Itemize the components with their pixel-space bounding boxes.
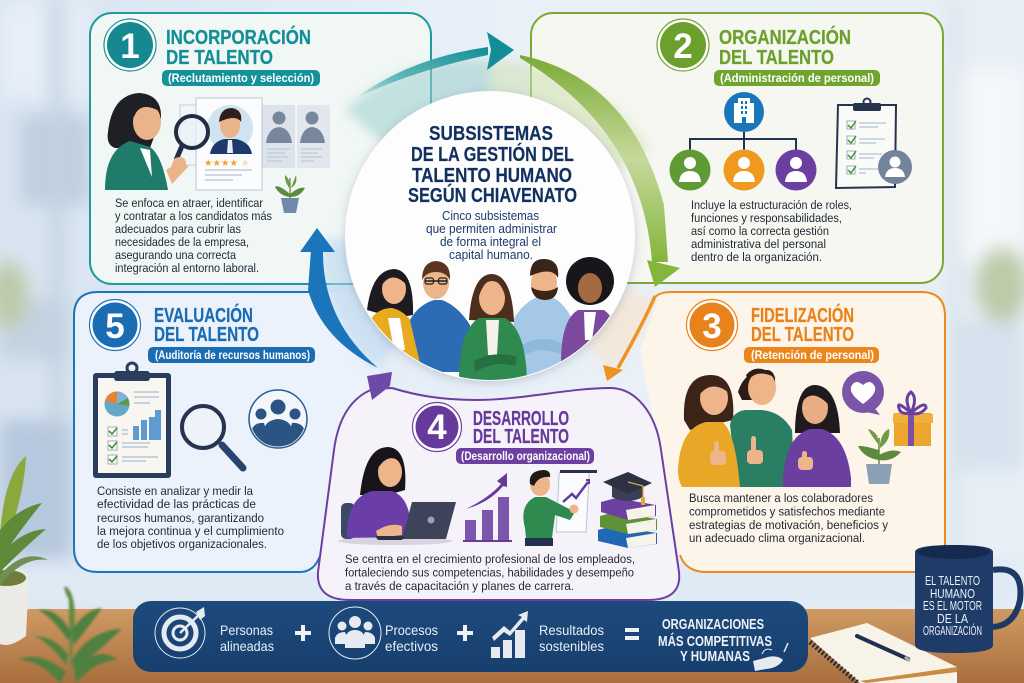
icon: company building [724,92,764,132]
badge 2: 2 [673,27,693,66]
plus sign [295,625,311,641]
mug text: EL TALENTO [925,573,980,588]
badge 5: 5 [105,307,125,346]
body text 3 [689,491,889,545]
notebook and pen [810,623,957,683]
body text 1: adecuados para cubrir las [115,222,241,236]
subtitle pill 4: (Desarrollo organizacional) [461,449,590,463]
body text 2: así como la correcta gestión [691,224,829,238]
body text 5: Consiste en analizar y medir la [97,484,253,498]
heading 1 [166,25,311,69]
icon: group of people [329,607,381,659]
icon: green employee [670,150,710,190]
icon: orange employee [724,150,764,190]
main title: DE LA GESTIÓN DEL [411,142,574,166]
heading 3: DEL TALENTO [751,324,854,346]
result text: ORGANIZACIONES [662,616,764,633]
plant: potted plant left [0,456,48,645]
body text 4: Se centra en el crecimiento profesional de los empleados, [345,552,635,566]
panel 2: organización del talento [531,13,943,283]
org chart [670,92,816,190]
result text [658,616,772,665]
body text 5: la mejora continua y el cumplimiento [97,524,284,538]
central subtitle: que permiten administrar [426,222,557,236]
body text 2 [691,198,852,264]
label: personas alineadas [220,622,274,654]
body text 1: asegurando una correcta [115,248,236,262]
badge 1 [104,19,156,71]
subtitle pill 2: (Administración de personal) [720,71,874,85]
illustration: woman at laptop [338,447,456,545]
person: woman in yellow blazer [367,269,427,367]
icon: plant pot [858,429,901,484]
heading 5: EVALUACIÓN [154,303,253,327]
central subtitle: de forma integral el [440,235,541,249]
body text 1: Se enfoca en atraer, identificar [115,196,263,210]
label: personas alineadas: Personas [220,622,273,638]
badge 4: 4 [427,408,447,447]
badge 5 [90,300,140,350]
heading 4 [473,408,569,448]
body text 1: y contratar a los candidatos más [115,209,272,223]
illustration: trainer with flip chart [523,470,597,546]
heading 3: FIDELIZACIÓN [751,303,854,327]
icon: clipboard with charts [93,363,171,478]
arrow: green 2 to 3 [520,55,680,287]
label: personas alineadas: alineadas [220,638,274,654]
icon: heart speech bubble [842,371,884,415]
subtitle pill 3: (Retención de personal) [751,348,874,362]
badge 3 [686,300,738,350]
panel 1: incorporación de talento [90,13,431,284]
heading 1: DE TALENTO [166,47,273,69]
heading 4: DESARROLLO [473,408,569,430]
main title: TALENTO HUMANO [412,165,572,187]
person: man in blue shirt [410,261,470,372]
illustration: three colleagues [678,369,851,487]
heading 3 [751,303,854,346]
heading 5 [154,303,259,346]
badge 4 [412,402,462,452]
label: procesos efectivos: Procesos [385,622,438,638]
body text 4: a través de capacitación y planes de carrera. [345,579,574,593]
central circle with title [345,91,635,382]
icon: rising bar chart [491,611,528,658]
panel 5: evaluación del talento [74,292,380,572]
body text 4 [345,552,635,593]
icon: target [155,607,205,658]
badge 3: 3 [702,307,722,346]
central subtitle: Cinco subsistemas [442,209,539,223]
heading 5: DEL TALENTO [154,324,259,346]
arrow: purple 4 to 5 head [367,372,392,400]
body text 5: de los objetivos organizacionales. [97,537,267,551]
illustration: recruiter with résumé: ★ [241,158,250,169]
label: procesos efectivos: efectivos [385,638,438,654]
main title [408,123,577,207]
mug text: ORGANIZACIÓN [923,623,982,638]
plus sign [457,625,473,641]
central subtitle [426,209,557,262]
body text 2: dentro de la organización. [691,250,822,264]
icon: growth bars with arrow [463,473,512,542]
icon: plant in pot [275,175,305,213]
main title: SEGÚN CHIAVENATO [408,183,577,207]
coffee mug [915,545,1020,653]
illustration: team of five [367,257,618,382]
badge 1: 1 [120,27,140,66]
body text 3: un adecuado clima organizacional. [689,531,865,545]
body text 2: administrativa del personal [691,237,826,251]
label: procesos efectivos [385,622,438,654]
label: resultados sostenibles: Resultados [539,622,604,638]
icon: hand holding person [753,643,788,671]
icon: team circle [249,390,307,450]
label: resultados sostenibles: sostenibles [539,638,604,654]
mug text [923,573,982,638]
plant: blurred foreground leaves [18,586,122,683]
central subtitle: capital humano. [449,248,533,262]
icon: books and graduation cap [598,472,657,548]
icon: checklist clipboard with person [836,98,912,188]
icon: purple employee [776,150,816,190]
badge 2 [657,19,709,71]
arrow: teal 1 to 2 [356,32,514,98]
body text 3: Busca mantener a los colaboradores [689,491,873,505]
panel 4: desarrollo del talento [318,372,679,600]
body text 3: comprometidos y satisfechos mediante [689,504,885,518]
wooden desk [0,609,1024,683]
label: resultados sostenibles [539,622,604,654]
illustration: recruiter with résumé: ★★★★ [204,158,238,169]
body text 3: estrategias de motivación, beneficios y [689,518,889,532]
body text 5 [97,484,284,551]
body text 2: funciones y responsabilidades, [691,211,842,225]
body text 1: necesidades de la empresa, [115,235,249,249]
body text 4: fortaleciendo sus competencias, habilidades y desempeño [345,566,634,580]
body text 1 [115,196,272,275]
panel 3: fidelización del talento [640,292,945,572]
heading 1: INCORPORACIÓN [166,25,311,49]
heading 2: ORGANIZACIÓN [719,25,851,49]
body text 1: integración al entorno laboral. [115,261,259,275]
soft coloured glow around central circle [320,59,655,372]
bottom summary bar [133,601,808,672]
icon: gift box [893,392,933,446]
illustration: recruiter with résumé [105,93,330,190]
arrow: orange 3 to 4 [603,296,655,381]
person: woman in green blazer [459,274,527,382]
subtitle pill 1: (Reclutamiento y selección) [168,71,314,85]
icon: magnifying glass [182,406,243,468]
main title: SUBSISTEMAS [429,123,553,145]
body text 5: efectividad de las prácticas de [97,497,256,511]
result text: MÁS COMPETITIVAS [658,633,772,650]
result text: Y HUMANAS [680,648,750,665]
heading 2 [719,25,851,69]
subtitle pill 5: (Auditoría de recursos humanos) [155,348,310,362]
equals sign [625,628,639,640]
body text 5: recursos humanos, garantizando [97,511,264,525]
body text 2: Incluye la estructuración de roles, [691,198,852,212]
arrow: blue 5 to 1 [300,228,378,368]
mug text: DE LA [937,611,968,626]
heading 2: DEL TALENTO [719,47,834,69]
person: woman in purple blazer [561,257,618,362]
mug text: HUMANO [930,586,975,601]
heading 4: DEL TALENTO [473,426,569,448]
person: man in light blue shirt [513,259,573,378]
mug text: ES EL MOTOR [923,598,982,613]
